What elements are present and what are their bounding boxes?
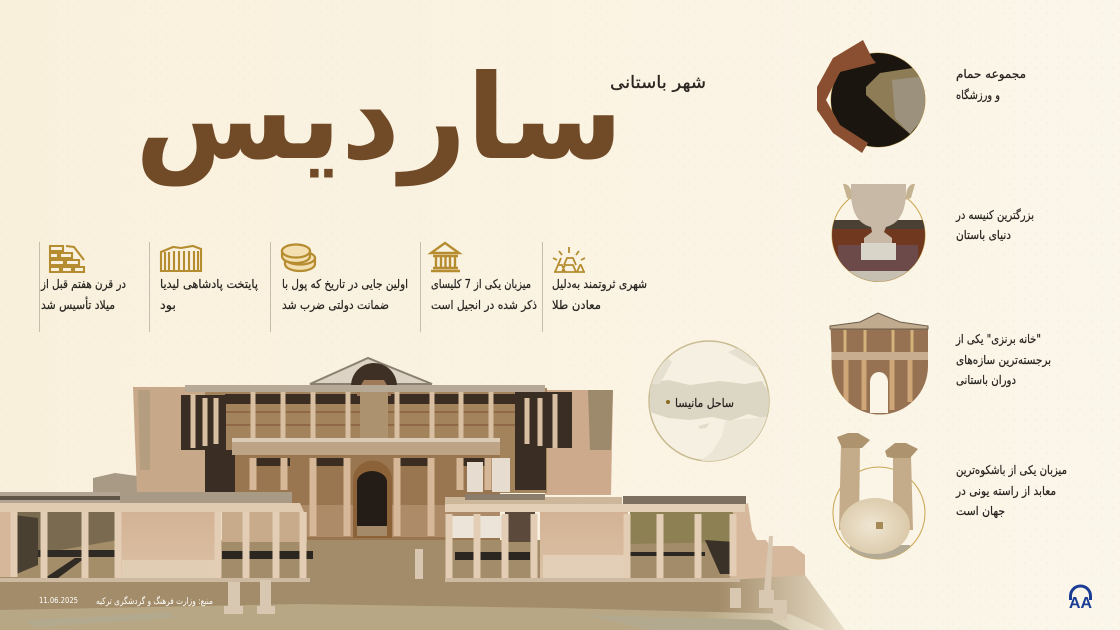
pediment	[310, 358, 432, 384]
text	[282, 277, 408, 313]
label: دنیای باستان	[956, 228, 1011, 242]
text: میزبان یکی از 7 کلیسای	[431, 277, 531, 292]
icon: temple	[431, 243, 460, 271]
lower wall lighter base	[230, 505, 500, 537]
logo: AA	[1069, 586, 1092, 612]
left tower	[133, 387, 205, 493]
upper entablature	[185, 385, 545, 392]
right tower	[545, 390, 613, 495]
label	[955, 208, 1034, 242]
feature 2: church urn	[832, 184, 1034, 283]
fact: church	[420, 242, 537, 332]
land shapes	[650, 348, 769, 461]
text: در قرن هفتم قبل از	[40, 277, 126, 292]
logo: AA: AA	[1069, 595, 1092, 612]
text: بود	[160, 298, 176, 313]
door	[353, 460, 392, 538]
label: و ورزشگاه	[956, 88, 1000, 103]
right wing	[445, 494, 805, 582]
label: جهان است	[956, 504, 1005, 518]
ruin behind left wing	[93, 473, 137, 492]
text: معادن طلا	[552, 298, 601, 312]
feature 1: baths	[817, 40, 1026, 153]
label: مجموعه حمام	[956, 67, 1026, 82]
facts row	[39, 242, 647, 332]
label: بزرگترین کنیسه در	[955, 208, 1034, 223]
ground	[0, 540, 845, 630]
photo	[837, 433, 918, 559]
footer date: 11.06.2025	[39, 596, 78, 605]
icon: gold bars	[553, 247, 585, 272]
photo	[830, 313, 928, 416]
text	[40, 277, 126, 313]
text: ضمانت دولتی ضرب شد	[282, 298, 389, 313]
lighter foreground band	[0, 604, 825, 630]
icon: ruined colonnade	[161, 246, 201, 271]
label	[955, 463, 1067, 518]
text: ذکر شده در انجیل است	[431, 298, 537, 313]
subtitle: شهر باستانی	[610, 73, 706, 93]
text: اولین جایی در تاریخ که پول با	[282, 277, 408, 292]
label	[955, 332, 1051, 388]
feature 3: bronze house	[830, 313, 1051, 416]
fact: coins	[270, 242, 408, 332]
lower wall	[230, 450, 500, 540]
main back wall upper	[205, 388, 547, 493]
label	[956, 67, 1026, 103]
footer source: منبع: وزارت فرهنگ و گردشگری ترکیه	[96, 595, 213, 607]
left recess	[181, 395, 226, 450]
text	[431, 277, 537, 313]
fact: founded	[39, 242, 126, 332]
icon: bricks	[50, 246, 84, 272]
text: شهری ثروتمند به‌دلیل	[552, 277, 647, 292]
map: Manisa locator	[648, 341, 775, 465]
middle ledge	[232, 441, 500, 455]
paving	[25, 612, 790, 630]
text: میلاد تأسیس شد	[41, 296, 115, 313]
whitened restoration	[467, 458, 510, 492]
text: پایتخت پادشاهی لیدیا	[160, 277, 258, 291]
left wing	[0, 492, 313, 582]
wall courses	[225, 412, 515, 425]
feature 4: temple columns	[833, 433, 1067, 559]
fact: capital	[149, 242, 258, 332]
photo	[817, 40, 926, 153]
title: ساردیس	[135, 49, 623, 187]
free standing ruins	[224, 536, 787, 620]
location label: ساحل مانیسا	[675, 396, 734, 410]
fact: gold	[542, 242, 647, 332]
right recess	[515, 392, 572, 490]
label: معابد از راسته یونی در	[955, 484, 1056, 499]
label: دوران باستانی	[956, 373, 1016, 388]
icon: coins	[282, 244, 315, 271]
dark strips	[225, 394, 520, 466]
label: برجسته‌ترین سازه‌های	[956, 353, 1051, 368]
photo	[832, 184, 925, 283]
upper columns	[193, 392, 555, 448]
text	[552, 277, 647, 312]
text	[160, 277, 258, 313]
label: میزبان یکی از باشکوه‌ترین	[956, 463, 1067, 478]
label: "خانه برنزی" یکی از	[955, 332, 1041, 347]
building photo	[0, 358, 845, 630]
lower columns	[253, 458, 488, 536]
arch	[351, 363, 397, 392]
location dot	[666, 400, 670, 404]
